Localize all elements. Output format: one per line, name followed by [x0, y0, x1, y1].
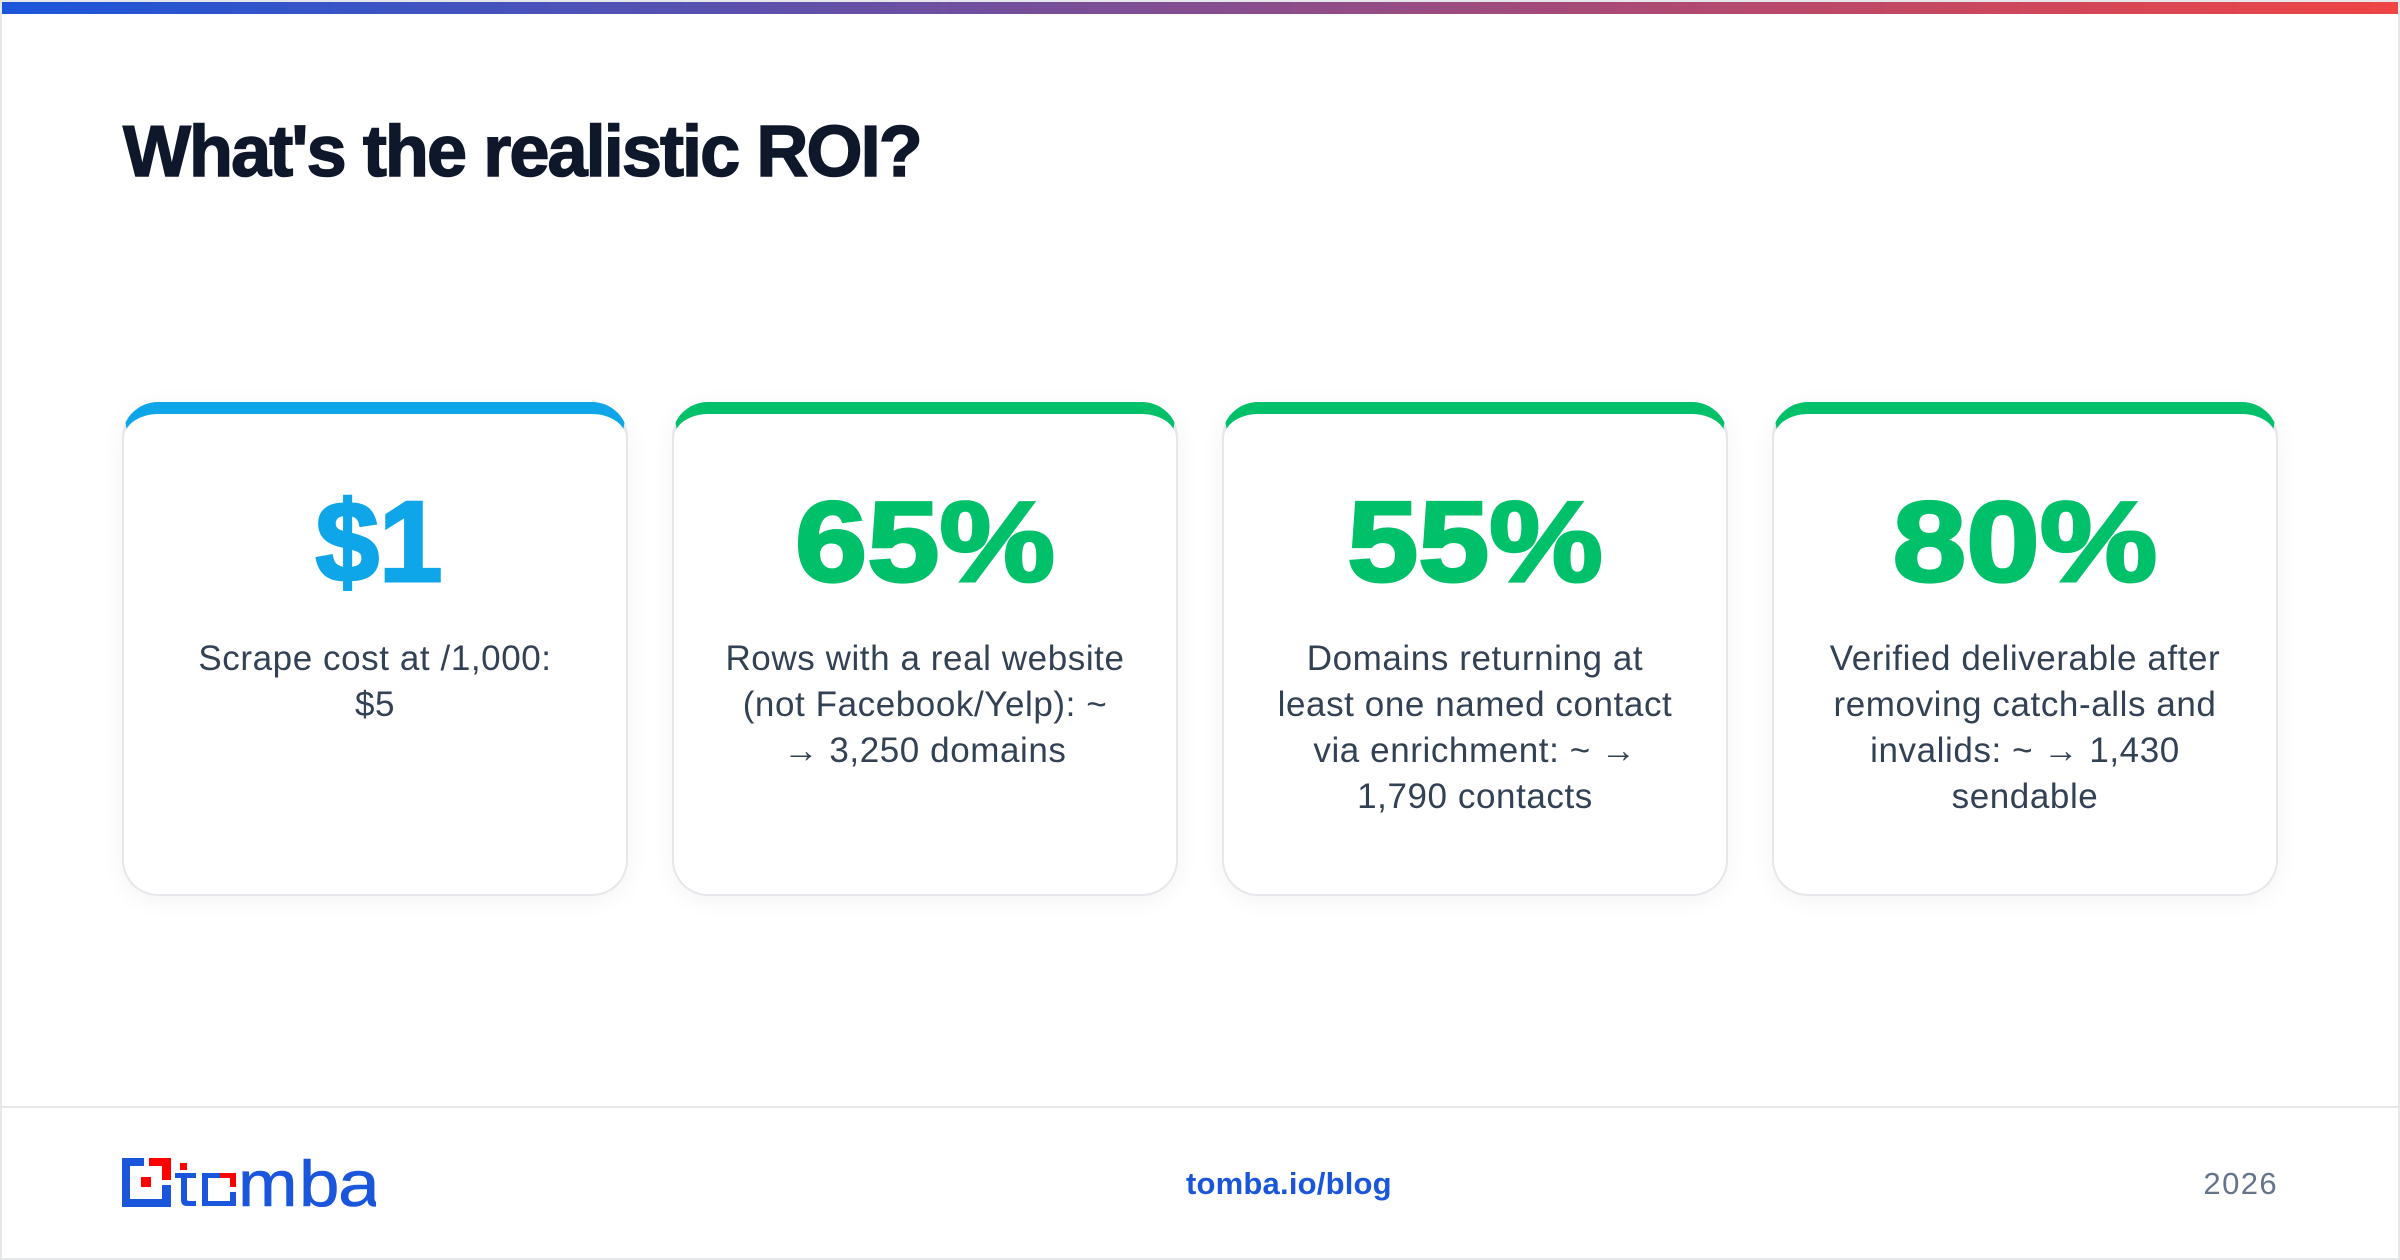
logo letter o — [202, 1173, 236, 1206]
panel: real websites — [672, 402, 1178, 896]
description: named contacts — [1278, 639, 1672, 816]
description: verified deliverable — [1830, 639, 2220, 816]
top gradient bar — [2, 2, 2398, 14]
footer link: tomba.io/blog — [1186, 1166, 1392, 1201]
description: named contacts: Domains returning at — [1307, 639, 1643, 678]
logo letter t — [175, 1163, 196, 1206]
description: real websites — [725, 639, 1125, 770]
panel: verified deliverable — [1772, 402, 2278, 896]
footer year: 2026 — [2203, 1166, 2278, 1201]
description: real websites: (not Facebook/Yelp): ~ — [743, 685, 1107, 724]
footer divider — [2, 1106, 2398, 1108]
stat: 80%: 80% — [1893, 479, 2157, 606]
description: verified deliverable: Verified deliverable after — [1830, 639, 2220, 678]
panel: scrape cost — [122, 402, 628, 896]
logo letters mba — [238, 1147, 381, 1220]
description: real websites: Rows with a real website — [725, 639, 1125, 678]
description: named contacts: 1,790 contacts — [1357, 777, 1593, 816]
description: verified deliverable: invalids: ~ → 1,430 — [1870, 731, 2180, 770]
description: verified deliverable: sendable — [1952, 777, 2098, 816]
description: scrape cost: Scrape cost at /1,000: — [198, 639, 552, 678]
stat: 65%: 65% — [795, 479, 1055, 606]
description: named contacts: via enrichment: ~ → — [1313, 731, 1637, 770]
stat: $1: $1 — [316, 479, 442, 606]
description: verified deliverable: removing catch-alls and — [1834, 685, 2216, 724]
description: scrape cost: $5 — [355, 685, 395, 724]
title: What's the realistic ROI? — [123, 112, 921, 192]
description: named contacts: least one named contact — [1278, 685, 1672, 724]
logo mark — [122, 1158, 171, 1207]
stat: 55%: 55% — [1347, 479, 1603, 606]
description: real websites: → 3,250 domains — [783, 731, 1067, 770]
description: scrape cost — [198, 639, 552, 724]
logo: tomba — [122, 1158, 376, 1208]
panel: named contacts — [1222, 402, 1728, 896]
